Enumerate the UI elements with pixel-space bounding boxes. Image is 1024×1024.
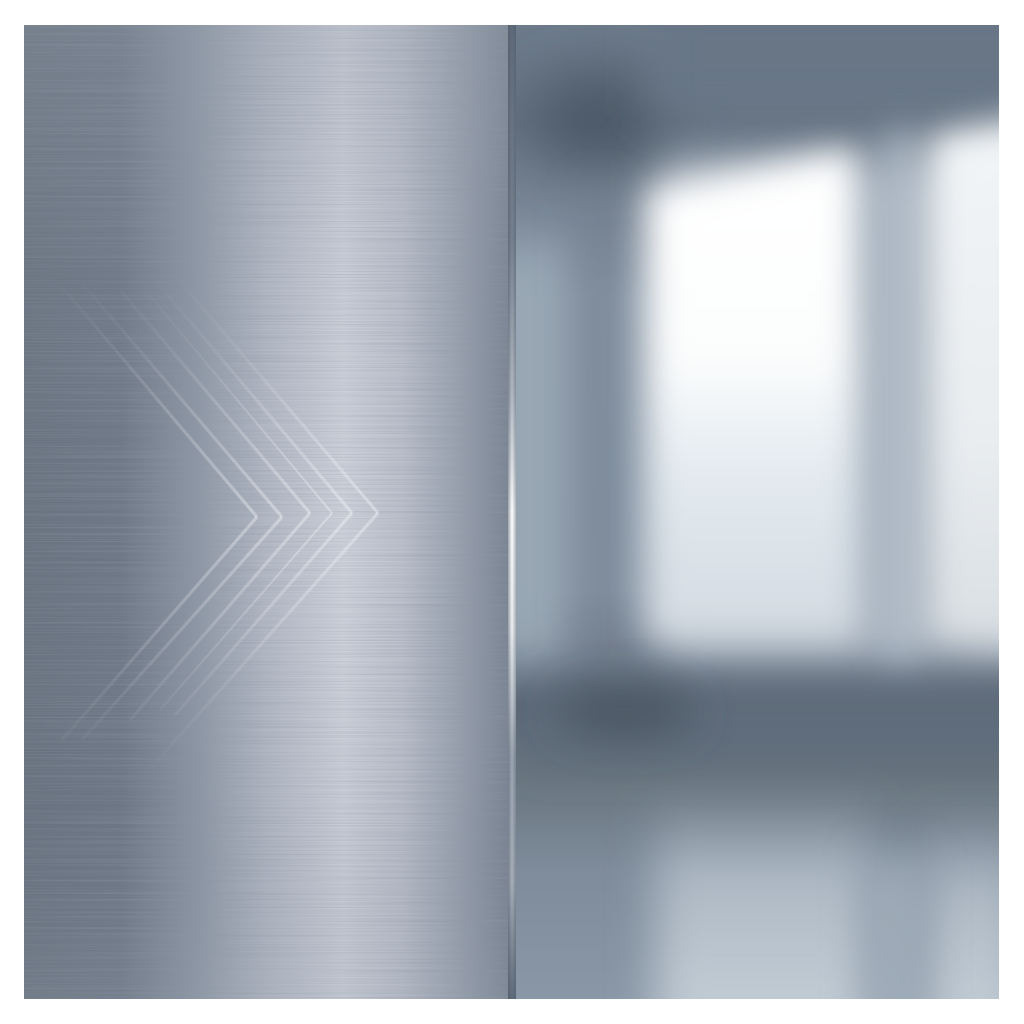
wall dark left of window [585, 190, 611, 650]
sill shadow band [530, 692, 1024, 758]
divider strip [508, 25, 516, 999]
icon: nested chevrons [62, 272, 378, 780]
floor reflection main [655, 795, 870, 1024]
floor mid tone [873, 848, 921, 999]
floor reflection right [916, 822, 999, 999]
window pane right [930, 115, 1024, 650]
window mullion [888, 130, 912, 660]
left wall glow [516, 240, 575, 680]
wall shadow top [530, 72, 670, 168]
wall around windows [660, 160, 1024, 660]
wall band top [650, 0, 1024, 115]
window pane main [648, 148, 858, 640]
panel: brushed metal [24, 25, 508, 999]
panel: blurred window room [516, 25, 999, 999]
